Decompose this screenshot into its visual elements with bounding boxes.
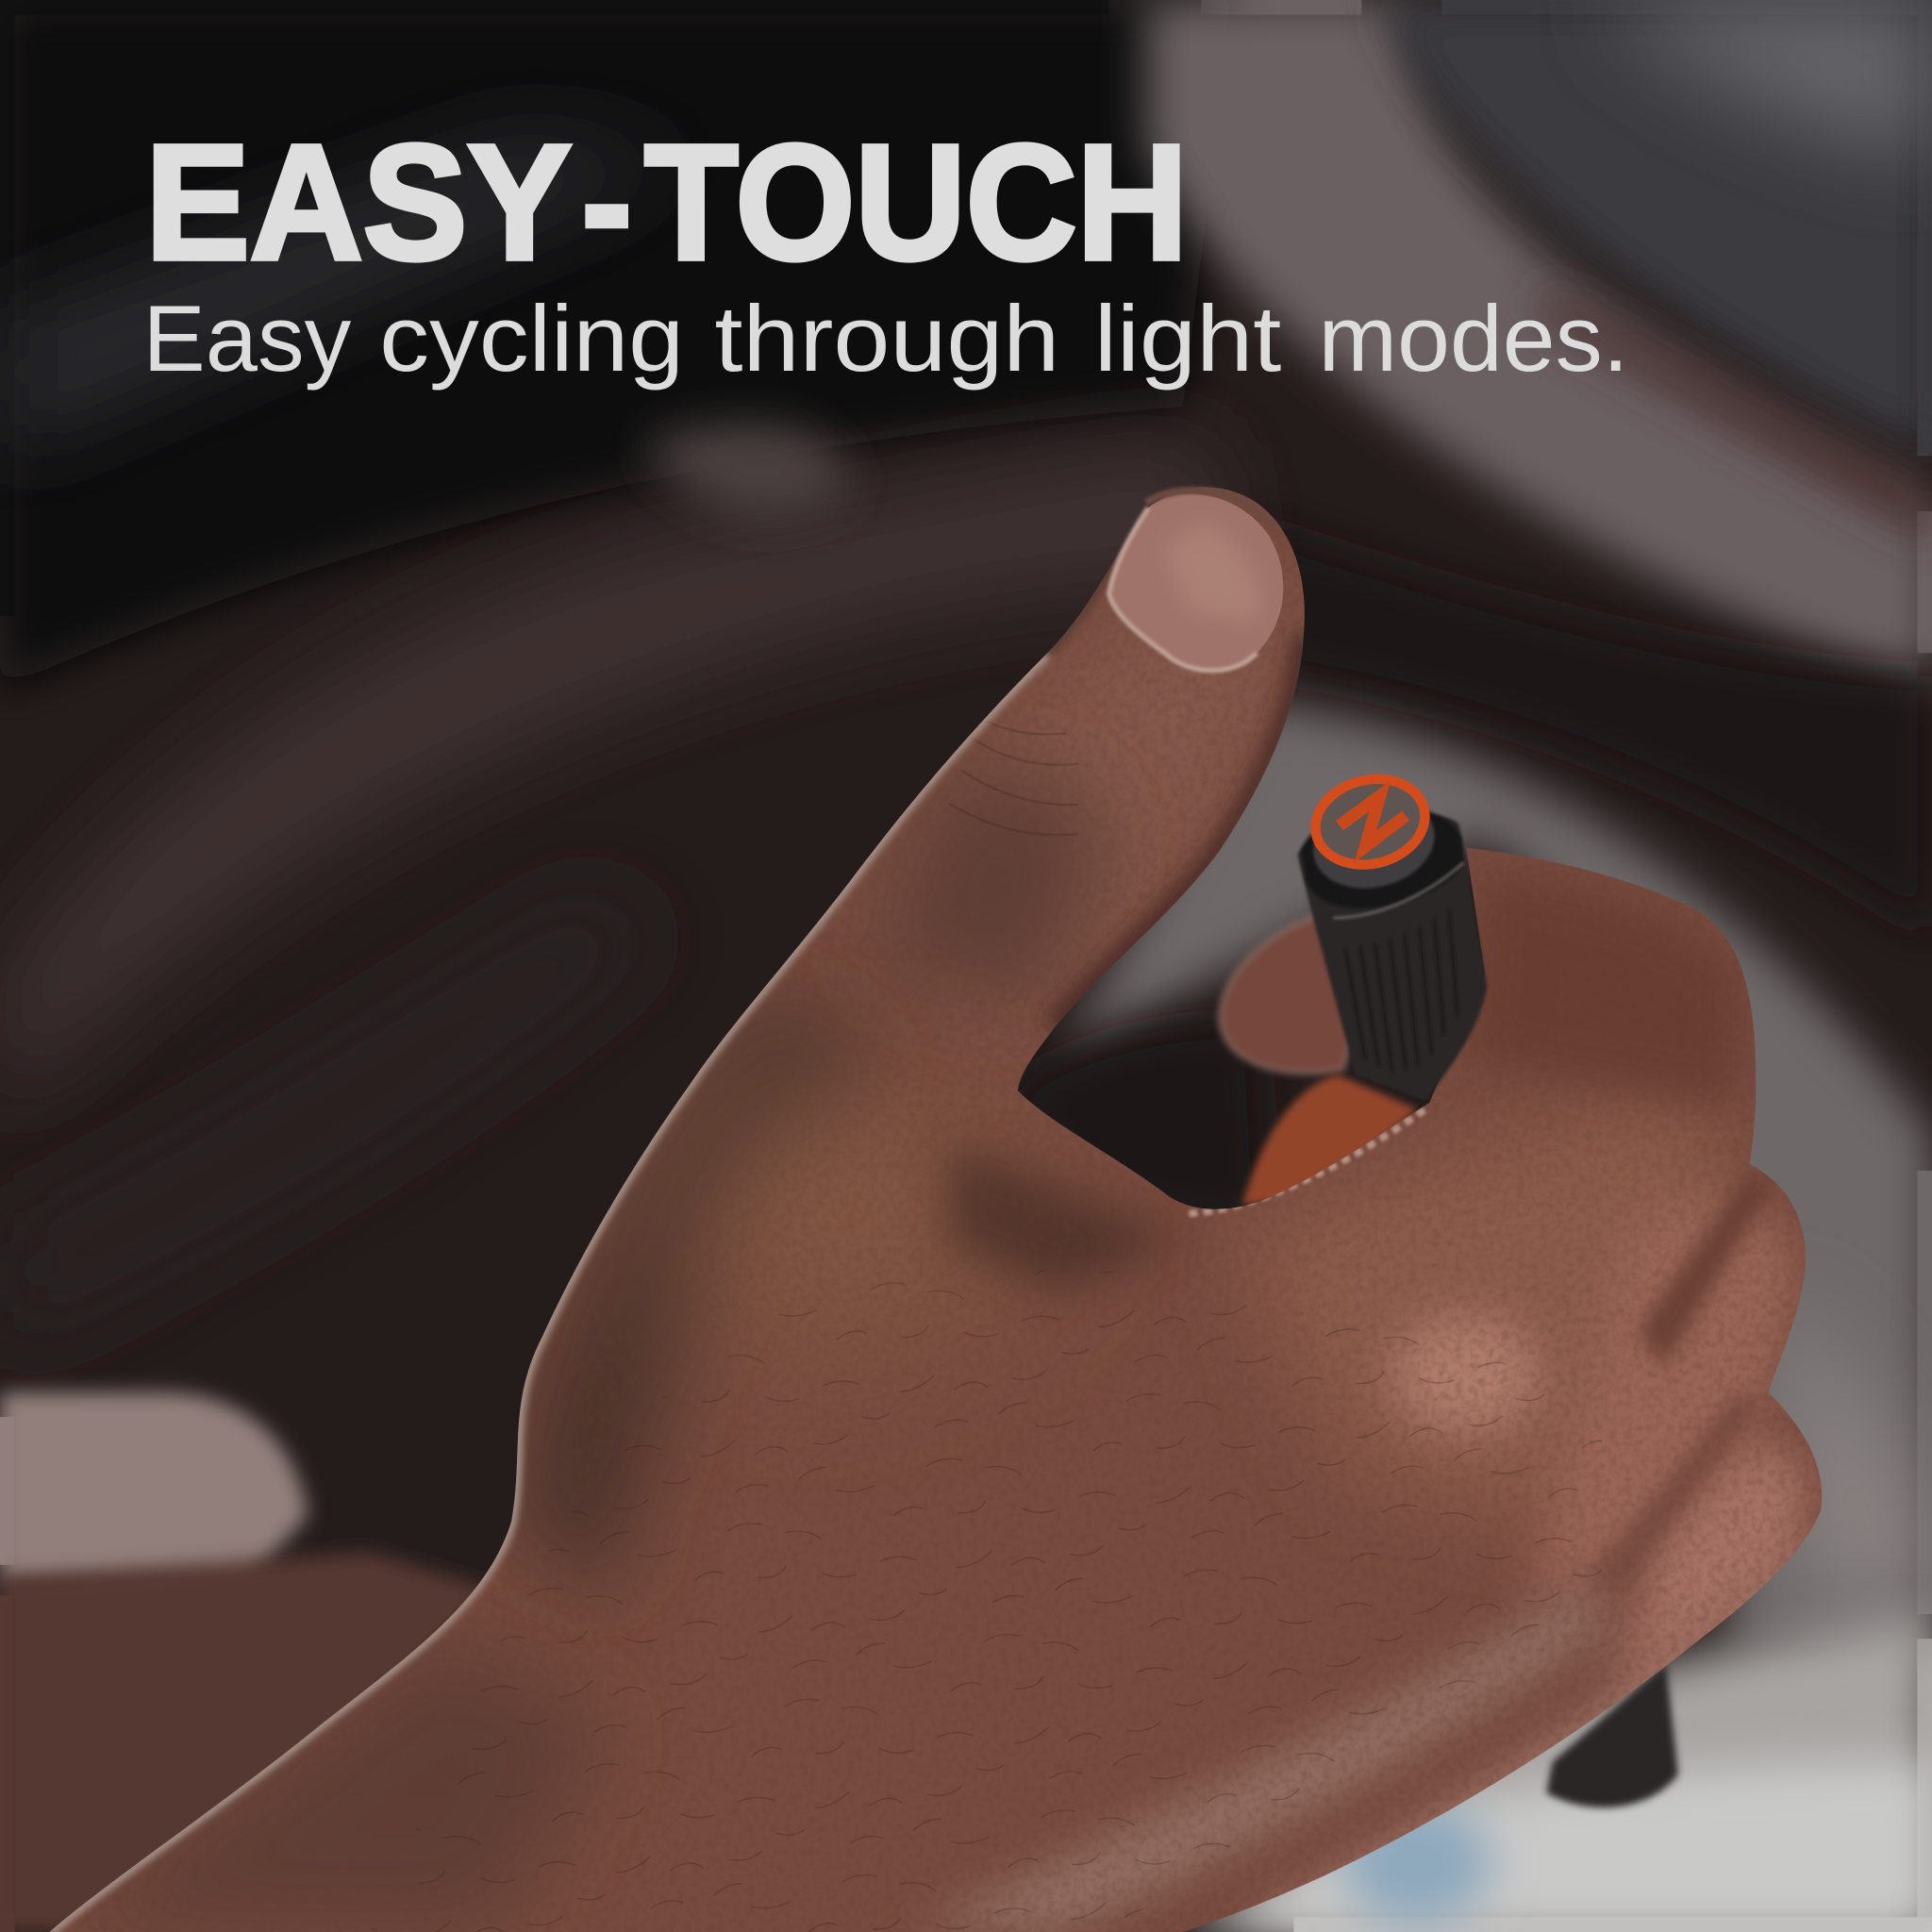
subtitle: modes. [1319, 287, 1629, 391]
title: TOUCH [644, 110, 1188, 293]
subtitle: cycling [379, 287, 684, 391]
skin grain [785, 606, 1819, 1932]
lower finger, orange glow [1242, 1074, 1417, 1205]
subtitle: Easy [143, 287, 352, 391]
thumb knuckle wrinkles [949, 715, 1078, 835]
subtitle: through [715, 287, 1059, 391]
subtitle: light [1094, 287, 1281, 391]
arm hair texture [370, 1270, 1602, 1932]
title: EASY [145, 110, 572, 293]
title: - [581, 110, 632, 293]
finger behind pen [1220, 914, 1368, 1074]
orange button ring [1307, 768, 1434, 875]
Z logo [1340, 796, 1406, 846]
hand [49, 485, 1823, 1932]
thumbnail [1109, 491, 1283, 672]
flashlight head with Z logo button [1297, 768, 1487, 1100]
pen tail behind the hand [1546, 1663, 1678, 1807]
